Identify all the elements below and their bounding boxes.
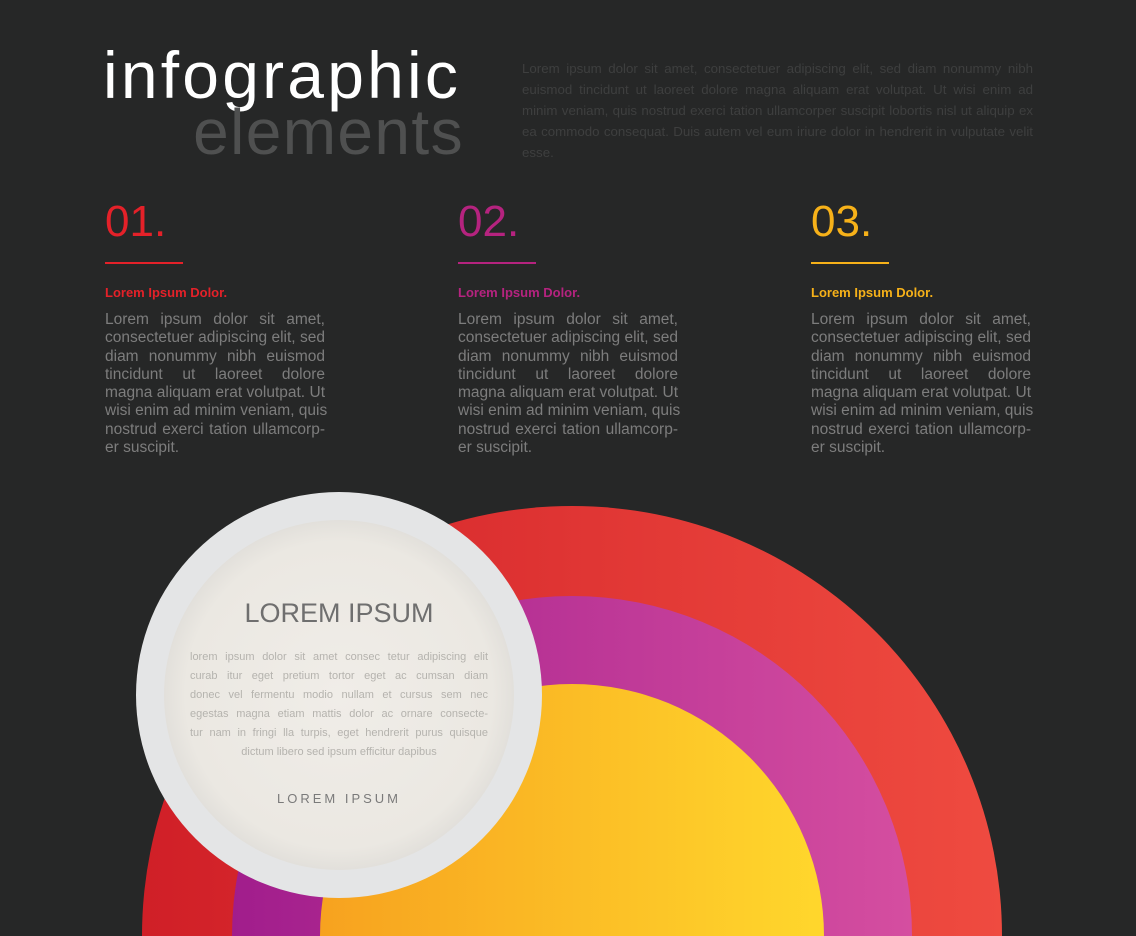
column 01: er suscipit. bbox=[105, 439, 179, 456]
column 02: Lorem ipsum dolor sit amet, bbox=[458, 311, 678, 328]
column 01: diam nonummy nibh euismod bbox=[105, 348, 325, 365]
column 01: tincidunt ut laoreet dolore bbox=[105, 366, 325, 383]
column 02: nostrud exerci tation ullamcorp- bbox=[458, 421, 678, 438]
column 02: tincidunt ut laoreet dolore bbox=[458, 366, 678, 383]
column 02: magna aliquam erat volutpat. Ut bbox=[458, 384, 678, 401]
column 02: diam nonummy nibh euismod bbox=[458, 348, 678, 365]
title bbox=[103, 38, 464, 168]
column 01: magna aliquam erat volutpat. Ut bbox=[105, 384, 325, 401]
column 03: wisi enim ad minim veniam, quis bbox=[811, 402, 1033, 419]
callout circle: LOREM IPSUM bbox=[277, 791, 401, 806]
column 02: wisi enim ad minim veniam, quis bbox=[458, 402, 680, 419]
column 02: consectetuer adipiscing elit, sed bbox=[458, 329, 678, 346]
column 01: wisi enim ad minim veniam, quis bbox=[105, 402, 327, 419]
column 03: er suscipit. bbox=[811, 439, 885, 456]
title: elements bbox=[193, 96, 464, 168]
column 01: Lorem Ipsum Dolor. bbox=[105, 285, 227, 300]
callout circle bbox=[136, 492, 542, 898]
callout circle: egestas magna etiam mattis dolor ac ornare consecte- bbox=[190, 708, 488, 720]
callout circle: donec vel fermentu modio nullam et cursus sem nec bbox=[190, 689, 488, 701]
column 02: 02. bbox=[458, 197, 519, 246]
callout circle: lorem ipsum dolor sit amet consec tetur adipiscing elit bbox=[190, 651, 488, 663]
column 03: nostrud exerci tation ullamcorp- bbox=[811, 421, 1031, 438]
column 01: Lorem ipsum dolor sit amet, bbox=[105, 311, 325, 328]
column 01 bbox=[105, 197, 327, 456]
title: infographic bbox=[103, 38, 461, 112]
column 02: Lorem Ipsum Dolor. bbox=[458, 285, 580, 300]
callout circle: curab itur eget pretium tortor eget ac cumsan diam bbox=[190, 670, 488, 682]
callout circle: dictum libero sed ipsum efficitur dapibus bbox=[241, 746, 437, 758]
callout circle: LOREM IPSUM bbox=[244, 598, 434, 628]
intro paragraph: Lorem ipsum dolor sit amet, consectetuer adipiscing elit, sed diam nonummy nibh euismod tincidunt ut laoreet dolore magna aliquam erat volutpat. Ut wisi enim ad minim veniam, quis nostrud exerci tation ullamcorper suscipit lobortis nisl ut aliquip ex ea commodo consequat. Duis autem vel eum iriure dolor in hendrerit in vulputate velit esse. bbox=[522, 61, 1033, 160]
column 03: magna aliquam erat volutpat. Ut bbox=[811, 384, 1031, 401]
column 03: diam nonummy nibh euismod bbox=[811, 348, 1031, 365]
column 03 bbox=[811, 197, 1033, 456]
column 03: consectetuer adipiscing elit, sed bbox=[811, 329, 1031, 346]
column 01: nostrud exerci tation ullamcorp- bbox=[105, 421, 325, 438]
callout circle: tur nam in fringi lla turpis, eget hendrerit purus quisque bbox=[190, 727, 488, 739]
column 01: consectetuer adipiscing elit, sed bbox=[105, 329, 325, 346]
column 03: Lorem ipsum dolor sit amet, bbox=[811, 311, 1031, 328]
column 02 bbox=[458, 197, 680, 456]
column 02: er suscipit. bbox=[458, 439, 532, 456]
column 03: 03. bbox=[811, 197, 872, 246]
column 03: tincidunt ut laoreet dolore bbox=[811, 366, 1031, 383]
column 01: 01. bbox=[105, 197, 166, 246]
column 03: Lorem Ipsum Dolor. bbox=[811, 285, 933, 300]
